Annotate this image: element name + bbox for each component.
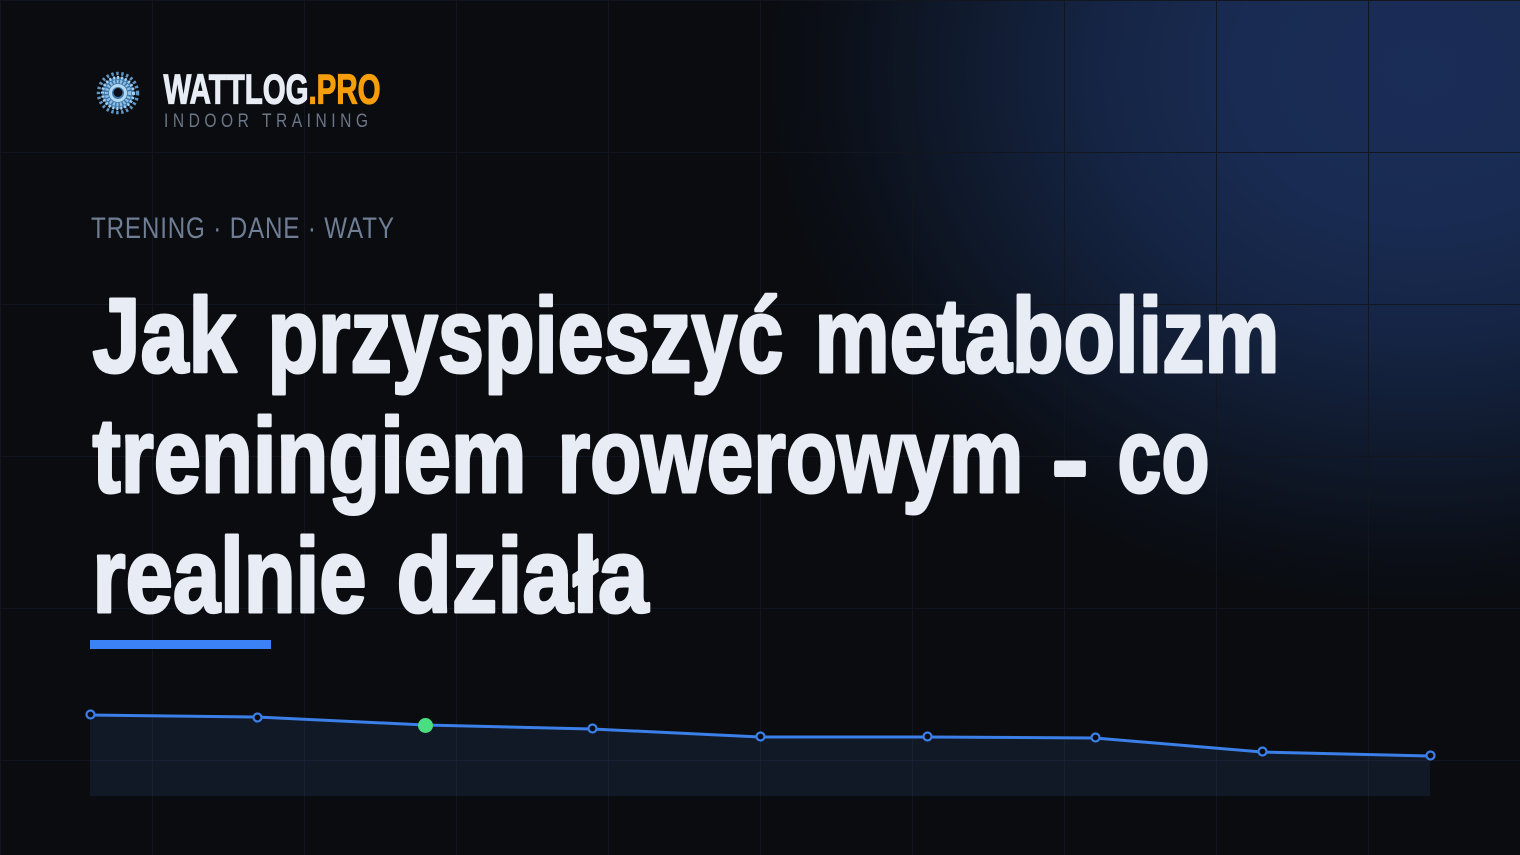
title line 3: działa — [396, 517, 649, 635]
title — [92, 277, 1280, 635]
logo wordmark: WATTLOG.PRO — [164, 66, 380, 112]
title line 1: przyspieszyć — [268, 277, 784, 395]
chart line — [90, 715, 1430, 756]
logo tagline: INDOOR TRAINING — [164, 109, 368, 131]
chart: power trend line — [86, 710, 1434, 796]
title line 2 — [92, 397, 1210, 520]
title line 2: rowerowym — [558, 397, 1024, 515]
chart area fill — [90, 715, 1430, 796]
title line 1: metabolizm — [814, 277, 1280, 395]
title accent underline — [90, 640, 271, 649]
title line 2: treningiem — [92, 397, 526, 515]
title line 2: co — [1118, 397, 1210, 515]
title line 1: Jak — [92, 277, 237, 395]
title line 3: realnie — [92, 517, 366, 635]
title line 3 — [92, 517, 649, 635]
logo: wattlog.pro — [98, 66, 380, 131]
icon: bicycle cassette — [98, 74, 138, 112]
eyebrow: categories: TRENING · DANE · WATY — [91, 212, 394, 245]
title line 1 — [92, 277, 1280, 395]
title line 2: – — [1054, 402, 1086, 520]
chart data points — [86, 710, 1434, 760]
highlighted data point — [418, 718, 433, 733]
